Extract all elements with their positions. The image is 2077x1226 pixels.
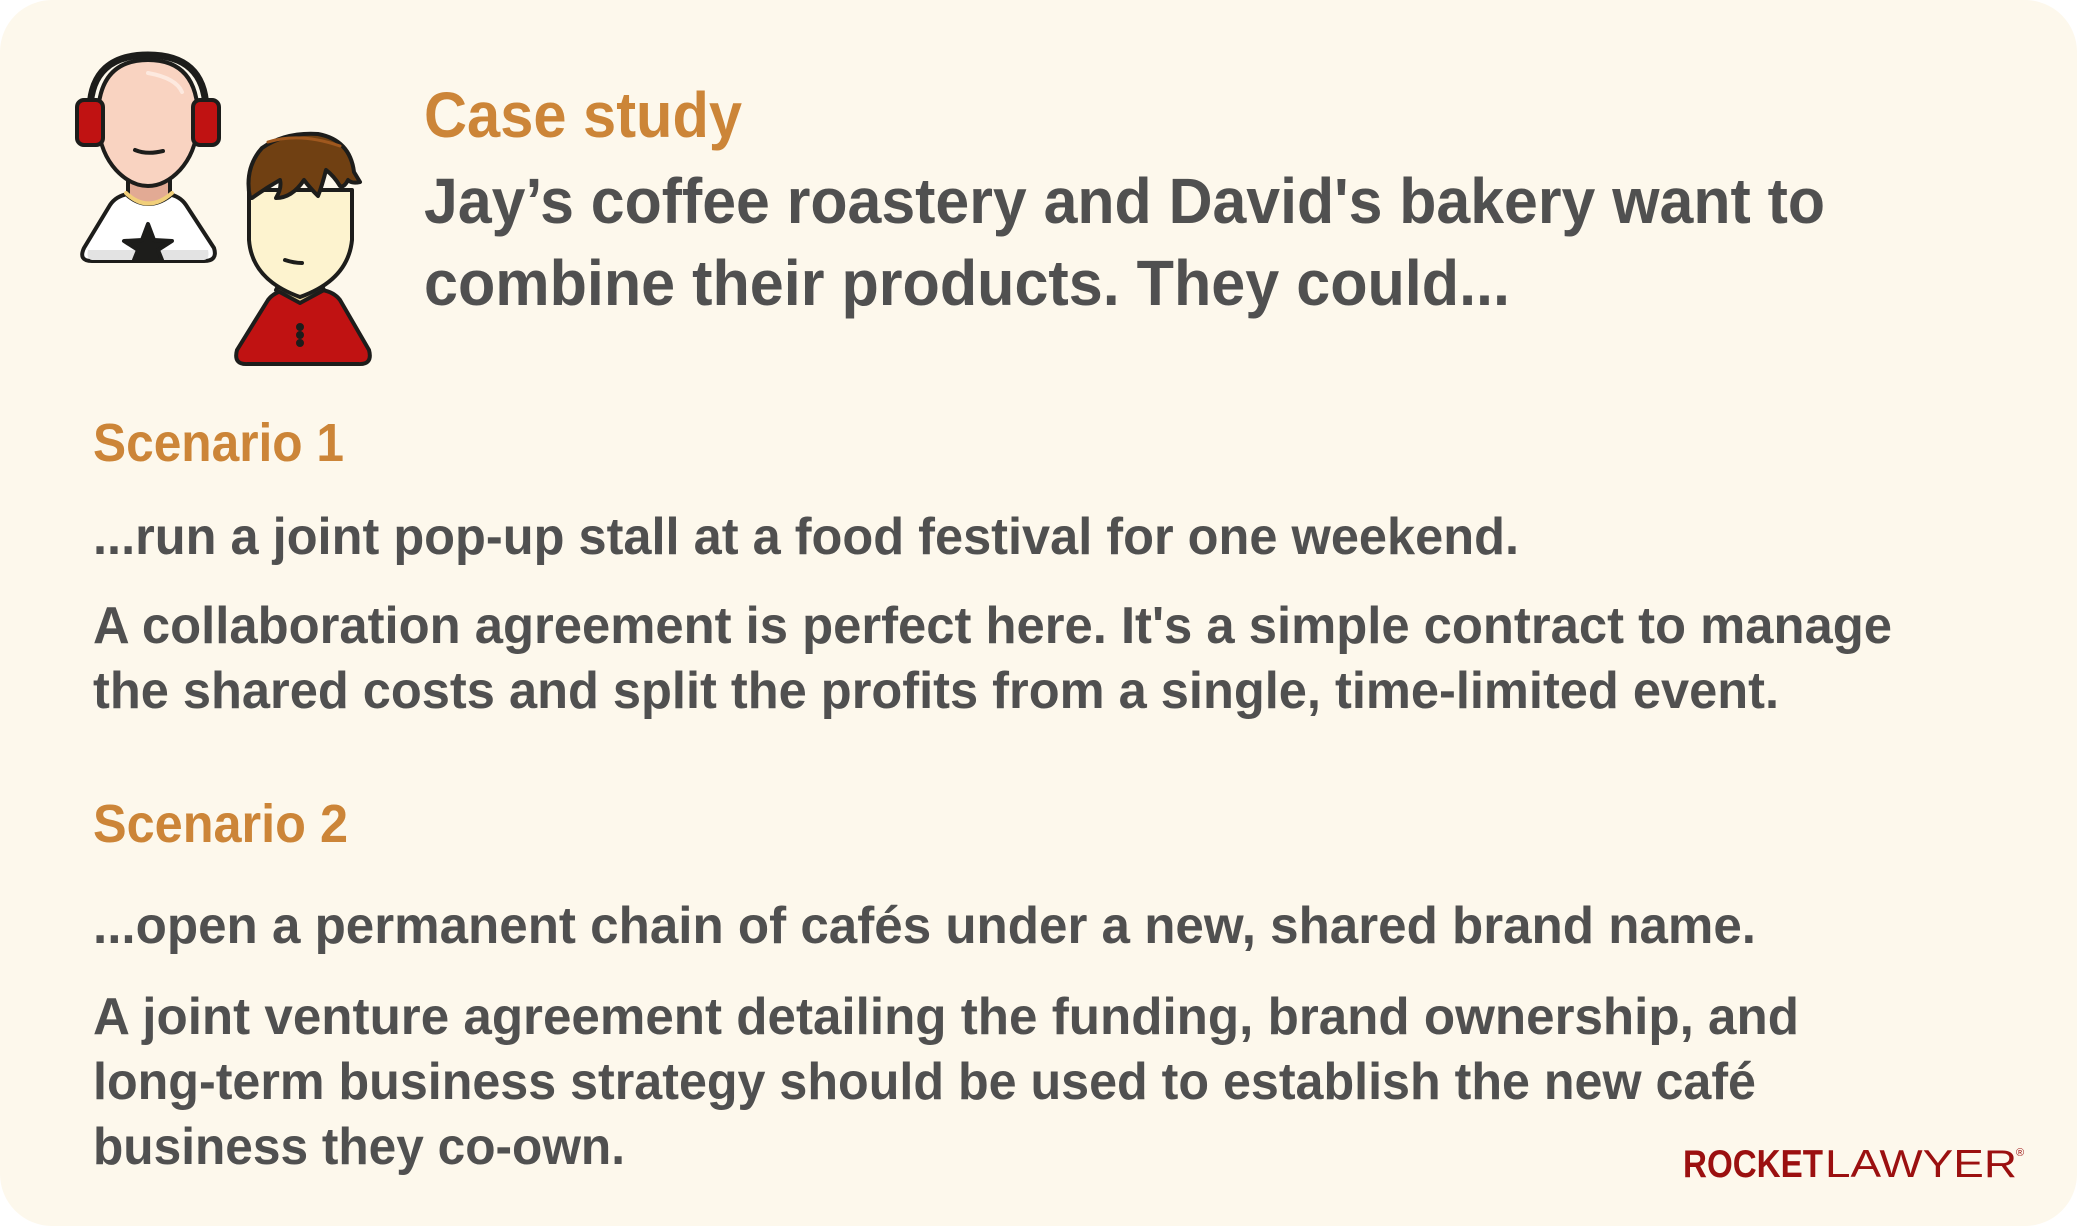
- text block: scenario 2: long-term business strategy should be used to establish the new café: [93, 1053, 1756, 1111]
- icon: two people: [77, 55, 370, 364]
- icon: person with brown hair: [236, 134, 370, 364]
- heading: combine their products. They could...: [424, 247, 1510, 319]
- heading: Jay’s coffee roastery and David's bakery want to: [424, 165, 1825, 237]
- icon: person with headphones: [77, 55, 219, 261]
- heading: [424, 165, 1825, 319]
- text block: scenario 2: ...open a permanent chain of cafés under a new, shared brand name.: [93, 897, 1756, 955]
- text block: scenario 2: business they co-own.: [93, 1118, 625, 1176]
- text block: scenario 1: ...run a joint pop-up stall at a food festival for one weekend.: [93, 508, 1519, 566]
- text block: scenario 2: [93, 897, 1799, 1176]
- heading: Scenario 2: Scenario 2: [93, 794, 348, 854]
- panel: scenario 2: [93, 794, 1799, 1176]
- panel: scenario 1: [93, 413, 1892, 720]
- logo: Rocket Lawyer: ROCKET: [1683, 1143, 1823, 1186]
- logo: Rocket Lawyer: ®: [2016, 1147, 2024, 1159]
- text block: scenario 1: the shared costs and split the profits from a single, time-limited event.: [93, 662, 1779, 720]
- text block: scenario 2: A joint venture agreement detailing the funding, brand ownership, and: [93, 988, 1799, 1046]
- text block: scenario 1: A collaboration agreement is perfect here. It's a simple contract to manage: [93, 597, 1892, 655]
- title: Case study: Case study: [424, 79, 742, 151]
- heading: Scenario 1: Scenario 1: [93, 413, 344, 473]
- text block: scenario 1: [93, 508, 1892, 720]
- logo: Rocket Lawyer: [1683, 1143, 2024, 1186]
- logo: Rocket Lawyer: LAWYER: [1825, 1143, 2017, 1186]
